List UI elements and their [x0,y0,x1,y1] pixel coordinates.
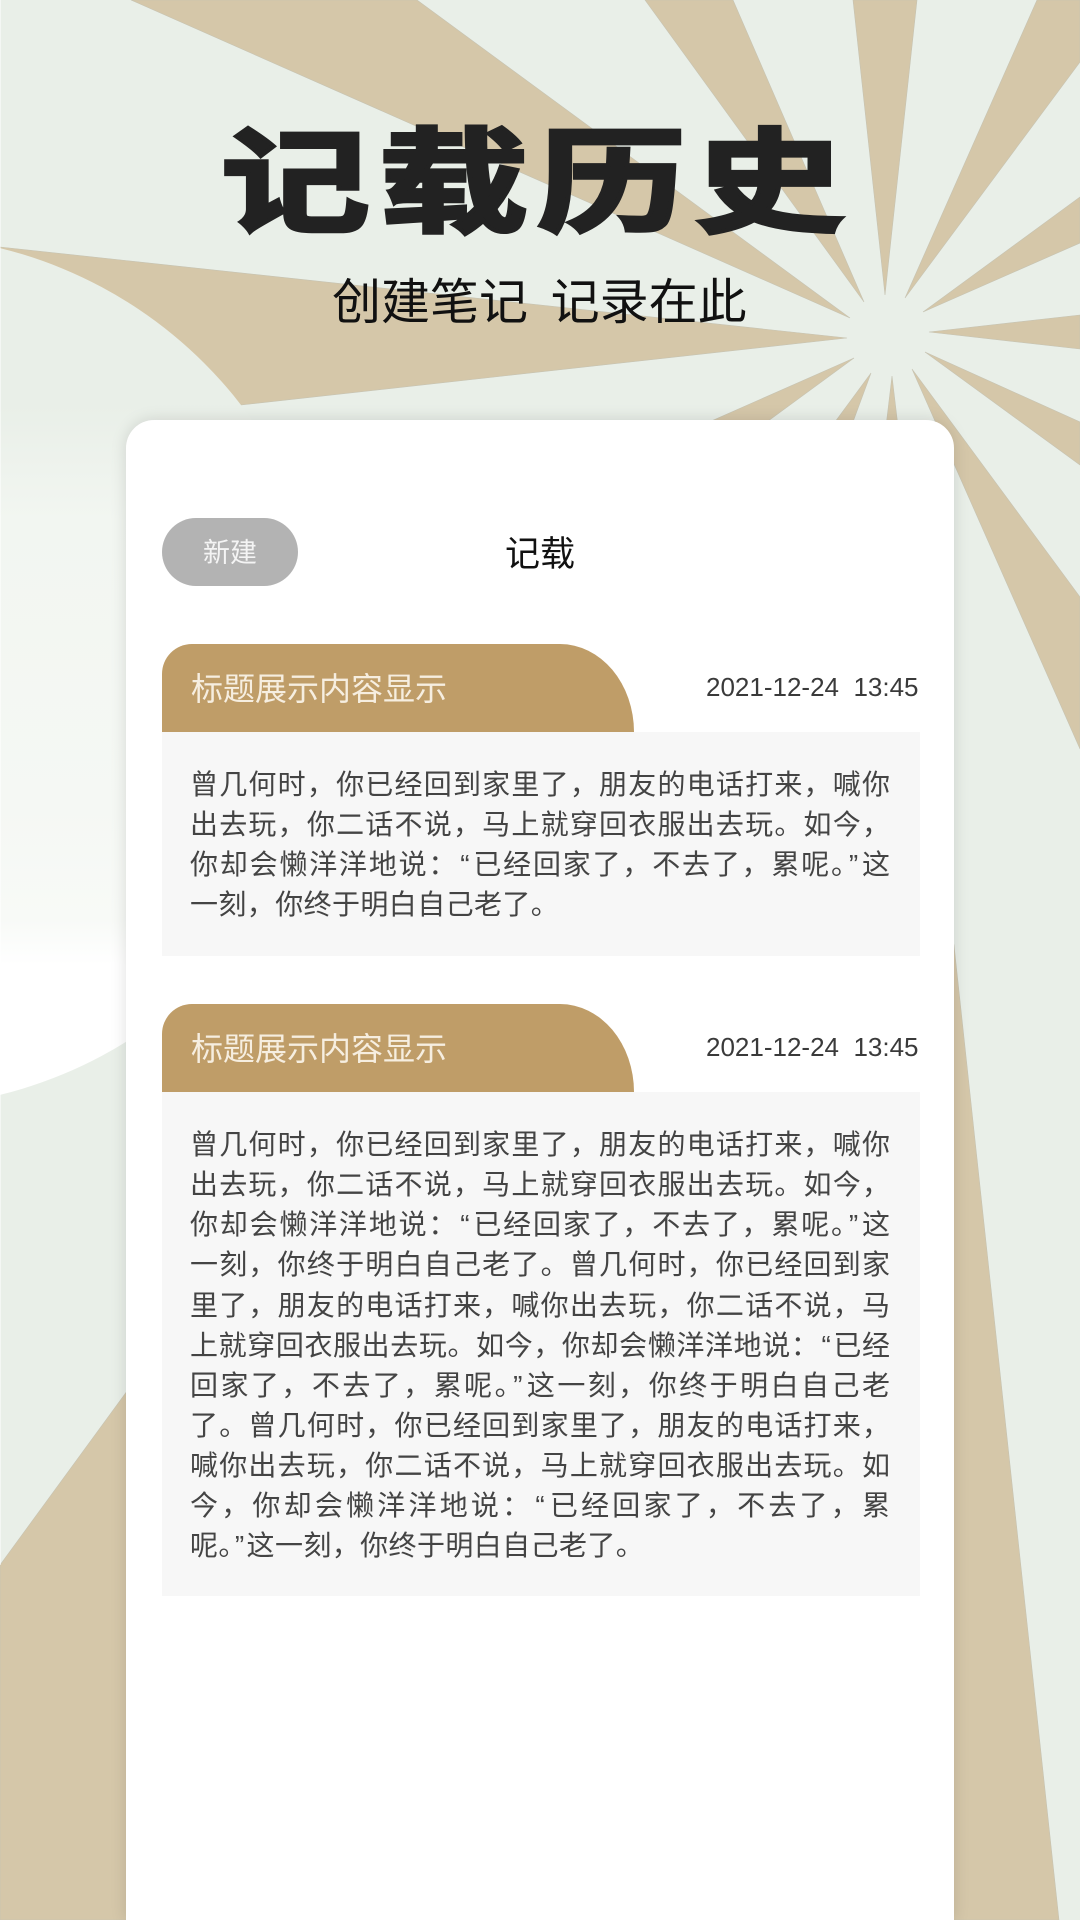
new note button [162,518,298,586]
note 1 title tab [162,644,634,732]
new note button: 新建 [203,538,257,568]
note 1 body text: 你却会懒洋洋地说：“已经回家了，不去了，累呢。”这 [190,849,890,880]
note 1 body text: 一刻，你终于明白自己老了。 [190,889,559,920]
note 2 body text: 上就穿回衣服出去玩。如今，你却会懒洋洋地说：“已经 [190,1330,890,1361]
note 2 body text: 出去玩，你二话不说，马上就穿回衣服出去玩。如今， [190,1169,890,1200]
note 2 body text: 一刻，你终于明白自己老了。曾几何时，你已经回到家 [190,1249,890,1280]
note 2 title text: 标题展示内容显示 [191,1031,447,1067]
note 2 date: 2021-12-24 13:45 [706,1032,919,1062]
note 1 body text: 曾几何时，你已经回到家里了，朋友的电话打来，喊你 [190,769,890,800]
note 2 body text: 你却会懒洋洋地说：“已经回家了，不去了，累呢。”这 [190,1209,890,1240]
note 2 body text: 里了，朋友的电话打来，喊你出去玩，你二话不说，马 [190,1290,890,1321]
note 2 body text [190,1129,890,1561]
note 2 body text: 回家了，不去了，累呢。”这一刻，你终于明白自己老 [190,1370,890,1401]
note 1 body text [190,769,890,920]
note 2 body text: 了。曾几何时，你已经回到家里了，朋友的电话打来， [190,1410,890,1441]
subtitle: 创建笔记 记录在此 [332,276,747,330]
panel: notes card [126,420,954,1920]
note 2 body text: 呢。”这一刻，你终于明白自己老了。 [190,1530,644,1561]
note 2 body text: 喊你出去玩，你二话不说，马上就穿回衣服出去玩。如 [190,1450,890,1481]
note 1 body panel [162,732,920,956]
note 2 title tab [162,1004,634,1092]
note 2 body panel [162,1092,920,1596]
note 1 body text: 出去玩，你二话不说，马上就穿回衣服出去玩。如今， [190,809,890,840]
note 1 title text: 标题展示内容显示 [191,671,447,707]
note 1 date: 2021-12-24 13:45 [706,672,919,702]
note 2 body text: 今，你却会懒洋洋地说：“已经回家了，不去了，累 [190,1490,890,1521]
title: 记载历史 [221,120,853,247]
note 2 body text: 曾几何时，你已经回到家里了，朋友的电话打来，喊你 [190,1129,890,1160]
card heading: 记载 [505,535,575,574]
